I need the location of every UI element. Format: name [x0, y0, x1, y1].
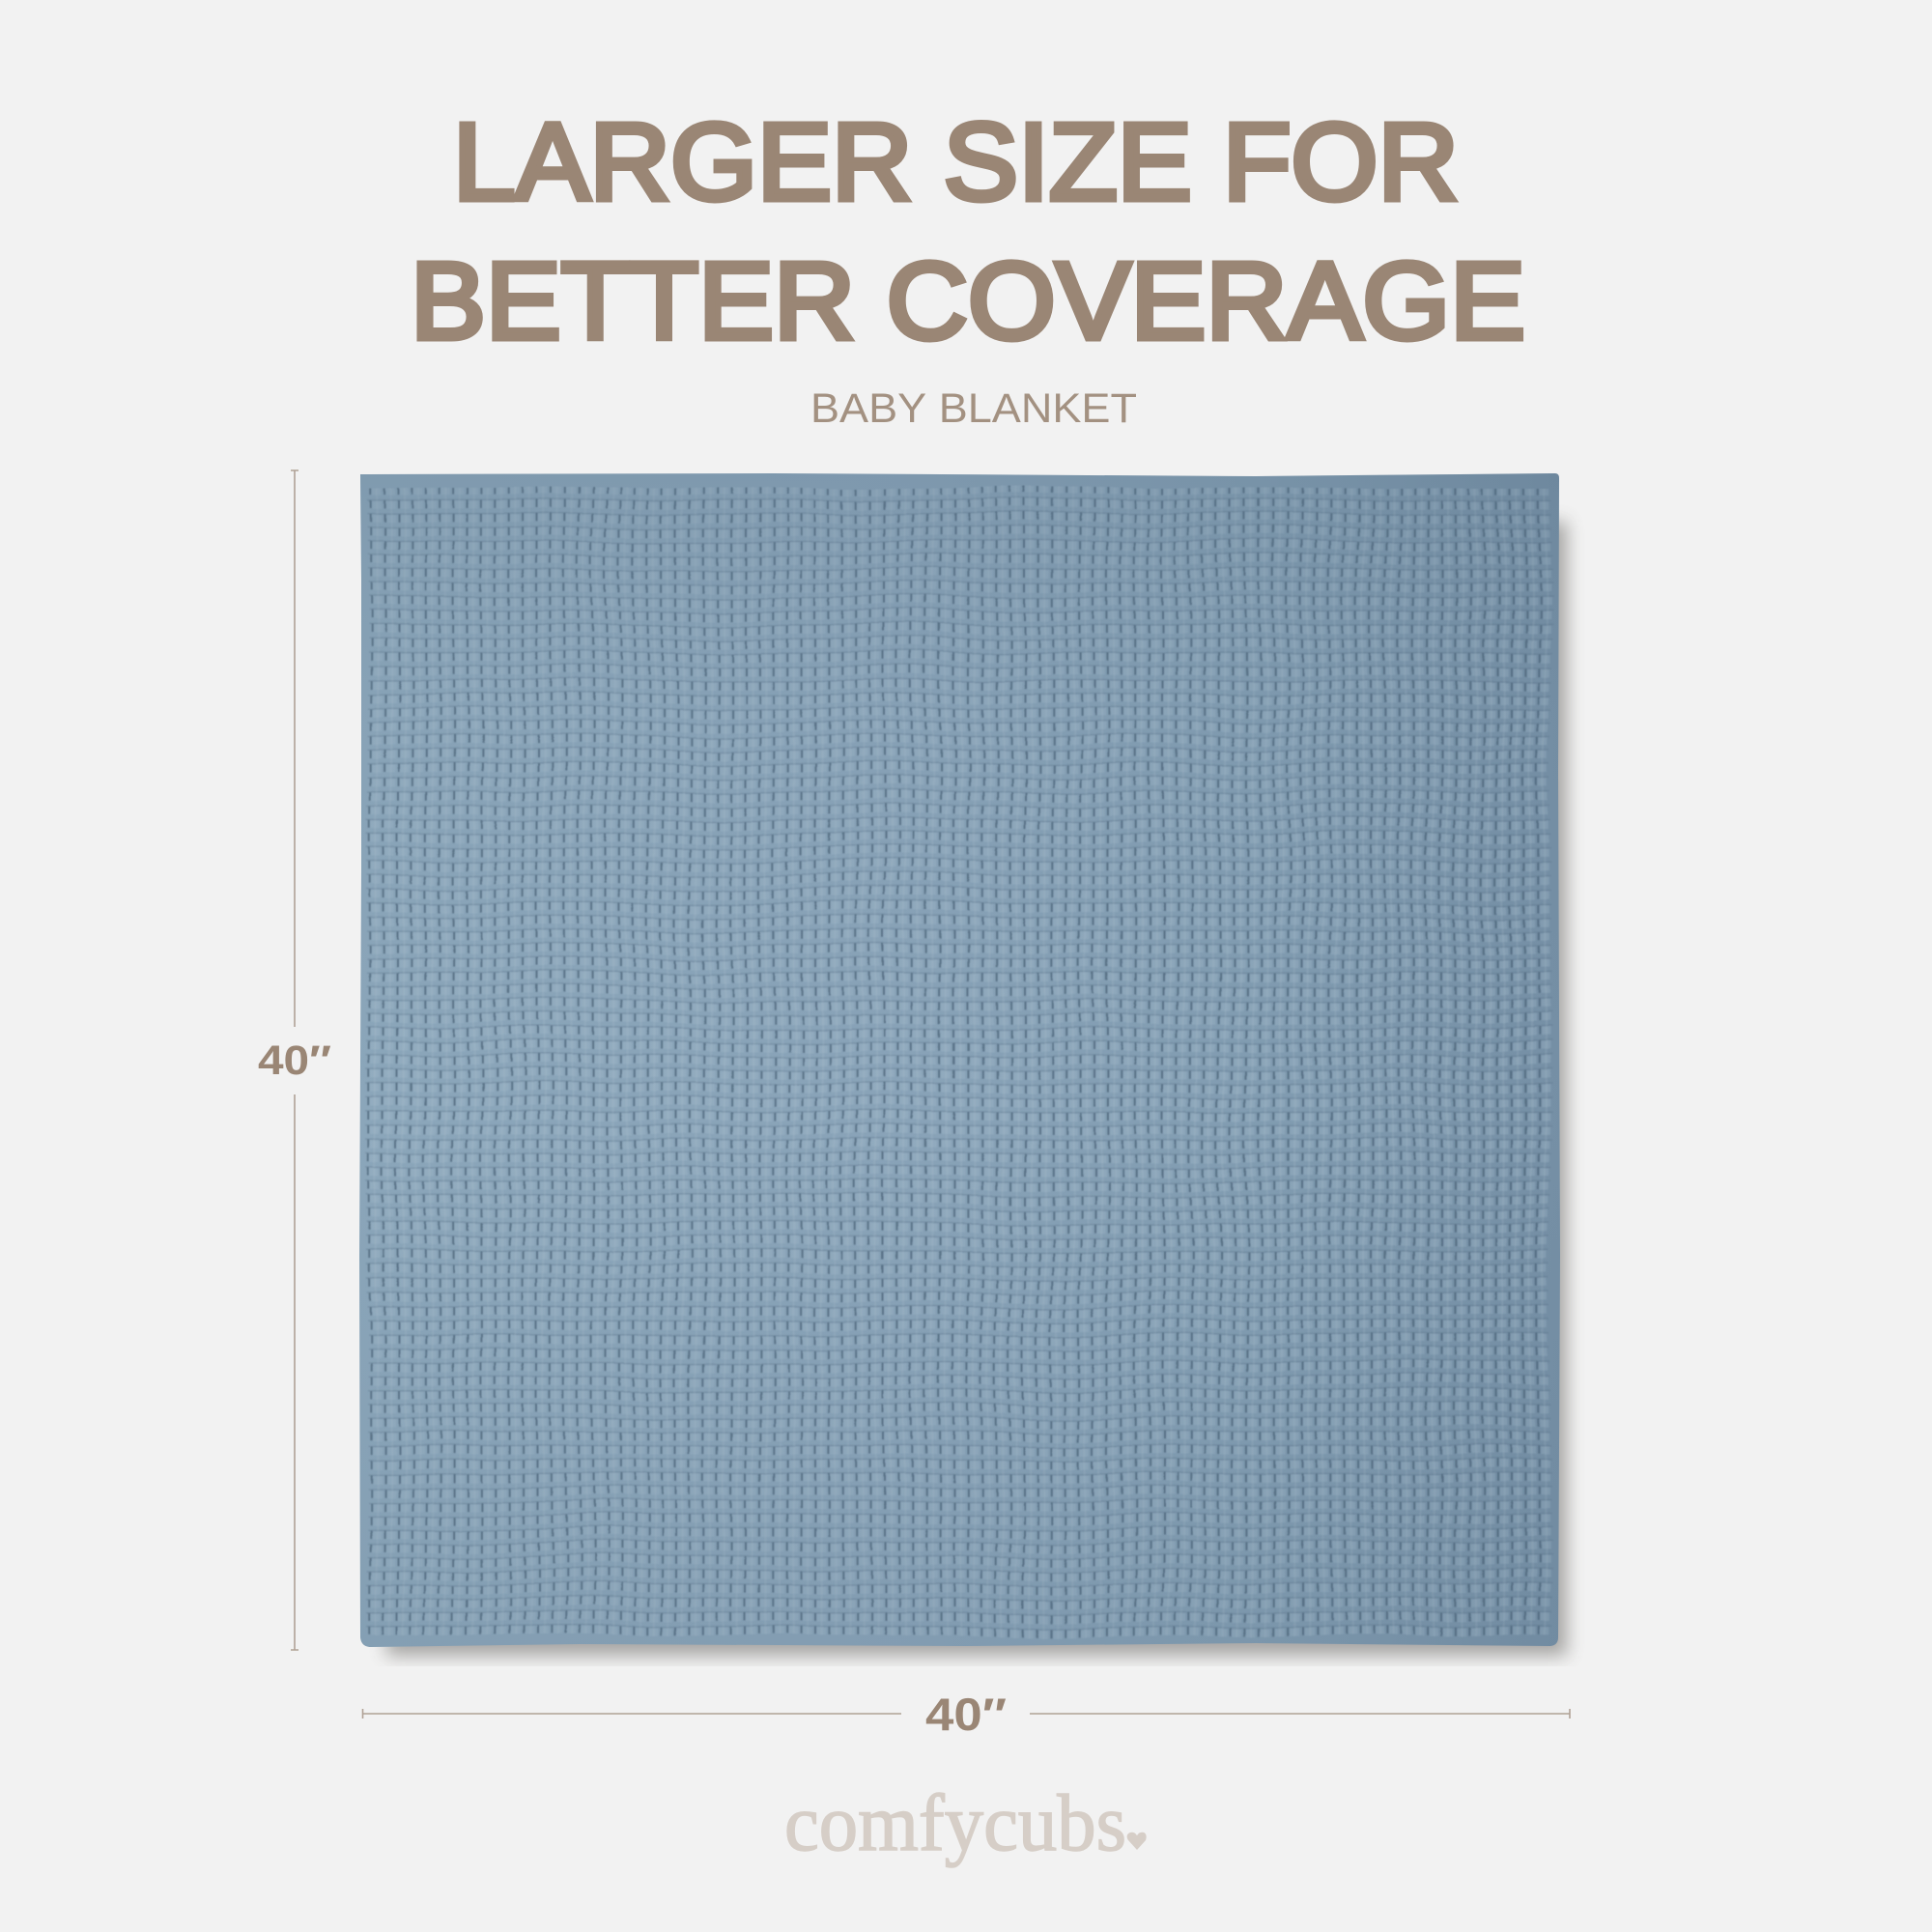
vertical dimension line: [291, 470, 298, 1650]
horizontal dimension label: 40″: [925, 1689, 1007, 1740]
title line 1: LARGER SIZE FOR: [453, 100, 1459, 222]
title: [411, 100, 1525, 361]
vertical dimension: [258, 470, 331, 1650]
brand logo: [784, 1778, 1147, 1868]
vertical dimension label: 40″: [258, 1037, 331, 1084]
blanket shadow: [386, 522, 1567, 1656]
brand wordmark: comfycubs: [784, 1778, 1126, 1868]
blanket photo: [353, 469, 1567, 1656]
subtitle: BABY BLANKET: [810, 385, 1137, 432]
horizontal dimension line: [363, 1709, 1570, 1719]
icon: heart: [1127, 1833, 1147, 1850]
horizontal dimension: [363, 1689, 1570, 1740]
blanket fabric: [353, 469, 1565, 1652]
title line 2: BETTER COVERAGE: [411, 240, 1525, 361]
infographic canvas: [259, 120, 1577, 1868]
